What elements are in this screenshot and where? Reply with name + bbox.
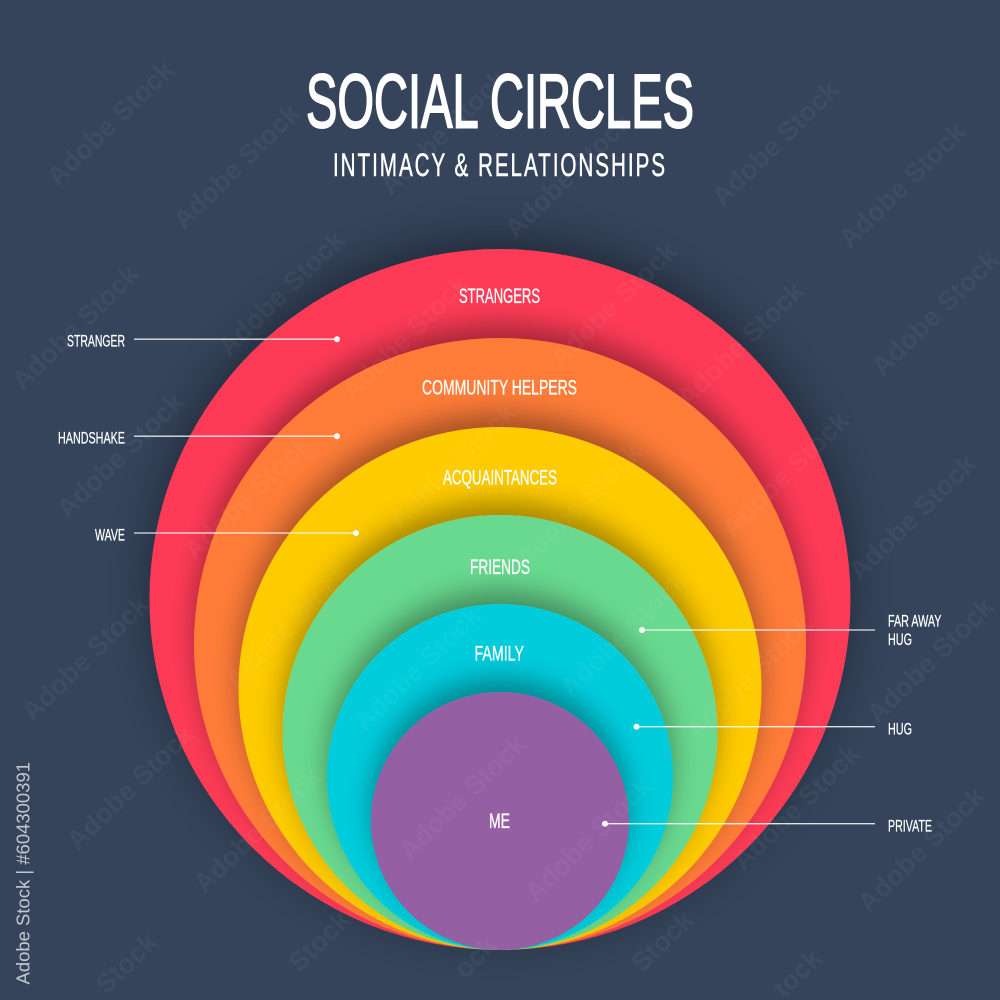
callout: hug: HUG <box>888 720 912 738</box>
watermarks: Stock <box>90 926 164 1000</box>
stock id text: Adobe Stock | #604300391 <box>14 762 34 984</box>
watermarks: Stock <box>283 904 357 978</box>
watermarks: Adobe Stock <box>852 780 991 918</box>
circle: strangers <box>150 249 850 950</box>
callout: handshake: HANDSHAKE <box>58 430 125 448</box>
watermarks: Stock <box>626 904 700 978</box>
watermarks: Adobe Stock <box>393 728 532 866</box>
watermarks: Adobe Stock <box>61 718 200 856</box>
circle: friends <box>282 515 718 950</box>
watermarks: Adobe Stock <box>544 235 683 373</box>
circle label: acquaintances: ACQUAINTANCES <box>443 466 557 490</box>
subtitle: INTIMACY & RELATIONSHIPS <box>333 147 667 183</box>
watermarks: Adobe Stock <box>499 106 638 244</box>
watermarks: Adobe Stock <box>509 436 648 574</box>
watermarks: Adobe Stock <box>167 97 306 235</box>
watermarks: Adobe Stock <box>374 63 513 201</box>
watermarks: Adobe Stock <box>727 738 866 876</box>
watermarks: Adobe Stock <box>348 599 487 737</box>
watermarks: Adobe Stock <box>680 608 819 746</box>
circle: me <box>371 692 629 950</box>
watermarks: Adobe Stock <box>336 268 475 406</box>
circle label: strangers: STRANGERS <box>459 285 540 308</box>
circle: acquaintances <box>238 427 762 950</box>
watermarks: Adobe Stock <box>833 116 972 254</box>
watermarks: Adobe Stock <box>716 405 855 543</box>
title: SOCIAL CIRCLES <box>306 60 694 144</box>
watermarks: ock <box>448 930 503 984</box>
callout: private <box>602 818 932 836</box>
watermarks: Adobe Stock <box>41 54 180 192</box>
circle label: community helpers: COMMUNITY HELPERS <box>422 376 577 400</box>
circle label: friends: FRIENDS <box>470 556 530 579</box>
callout: hug <box>634 720 912 738</box>
watermarks: Adobe Stock <box>671 275 810 413</box>
callout: wave <box>95 526 359 544</box>
watermarks: Adobe Stock <box>861 591 1000 729</box>
watermarks: Adobe Stock <box>6 258 145 396</box>
callout: far away hug: FAR AWAY <box>888 612 942 630</box>
callout: stranger: STRANGER <box>67 332 125 350</box>
watermarks: Adobe Stock <box>706 74 845 212</box>
callout: far away hug <box>639 612 942 649</box>
watermarks: Adobe Stock <box>178 428 317 566</box>
circle label: family: FAMILY <box>474 642 524 666</box>
callout: stranger <box>67 332 340 350</box>
callout: wave: WAVE <box>95 526 125 544</box>
watermarks: Adobe Stock <box>212 224 351 362</box>
callout: private: PRIVATE <box>888 818 932 836</box>
callout: far away hug: HUG <box>888 631 912 649</box>
watermarks: Adobe Stock <box>519 770 658 908</box>
watermarks: Adobe Stock <box>219 557 358 695</box>
circle: community helpers <box>194 338 806 950</box>
watermarks: Adobe Stock <box>16 589 155 727</box>
watermarks: Adobe Stock <box>383 396 522 534</box>
circle: family <box>327 604 673 950</box>
callout: handshake <box>58 430 340 448</box>
watermarks: Adobe Stock <box>188 761 327 899</box>
watermarks: Adobe Stock <box>843 448 982 586</box>
watermarks: Adobe Stock <box>51 386 190 524</box>
circle label: me: ME <box>489 810 510 833</box>
watermarks: Adobe Stock <box>554 565 693 703</box>
